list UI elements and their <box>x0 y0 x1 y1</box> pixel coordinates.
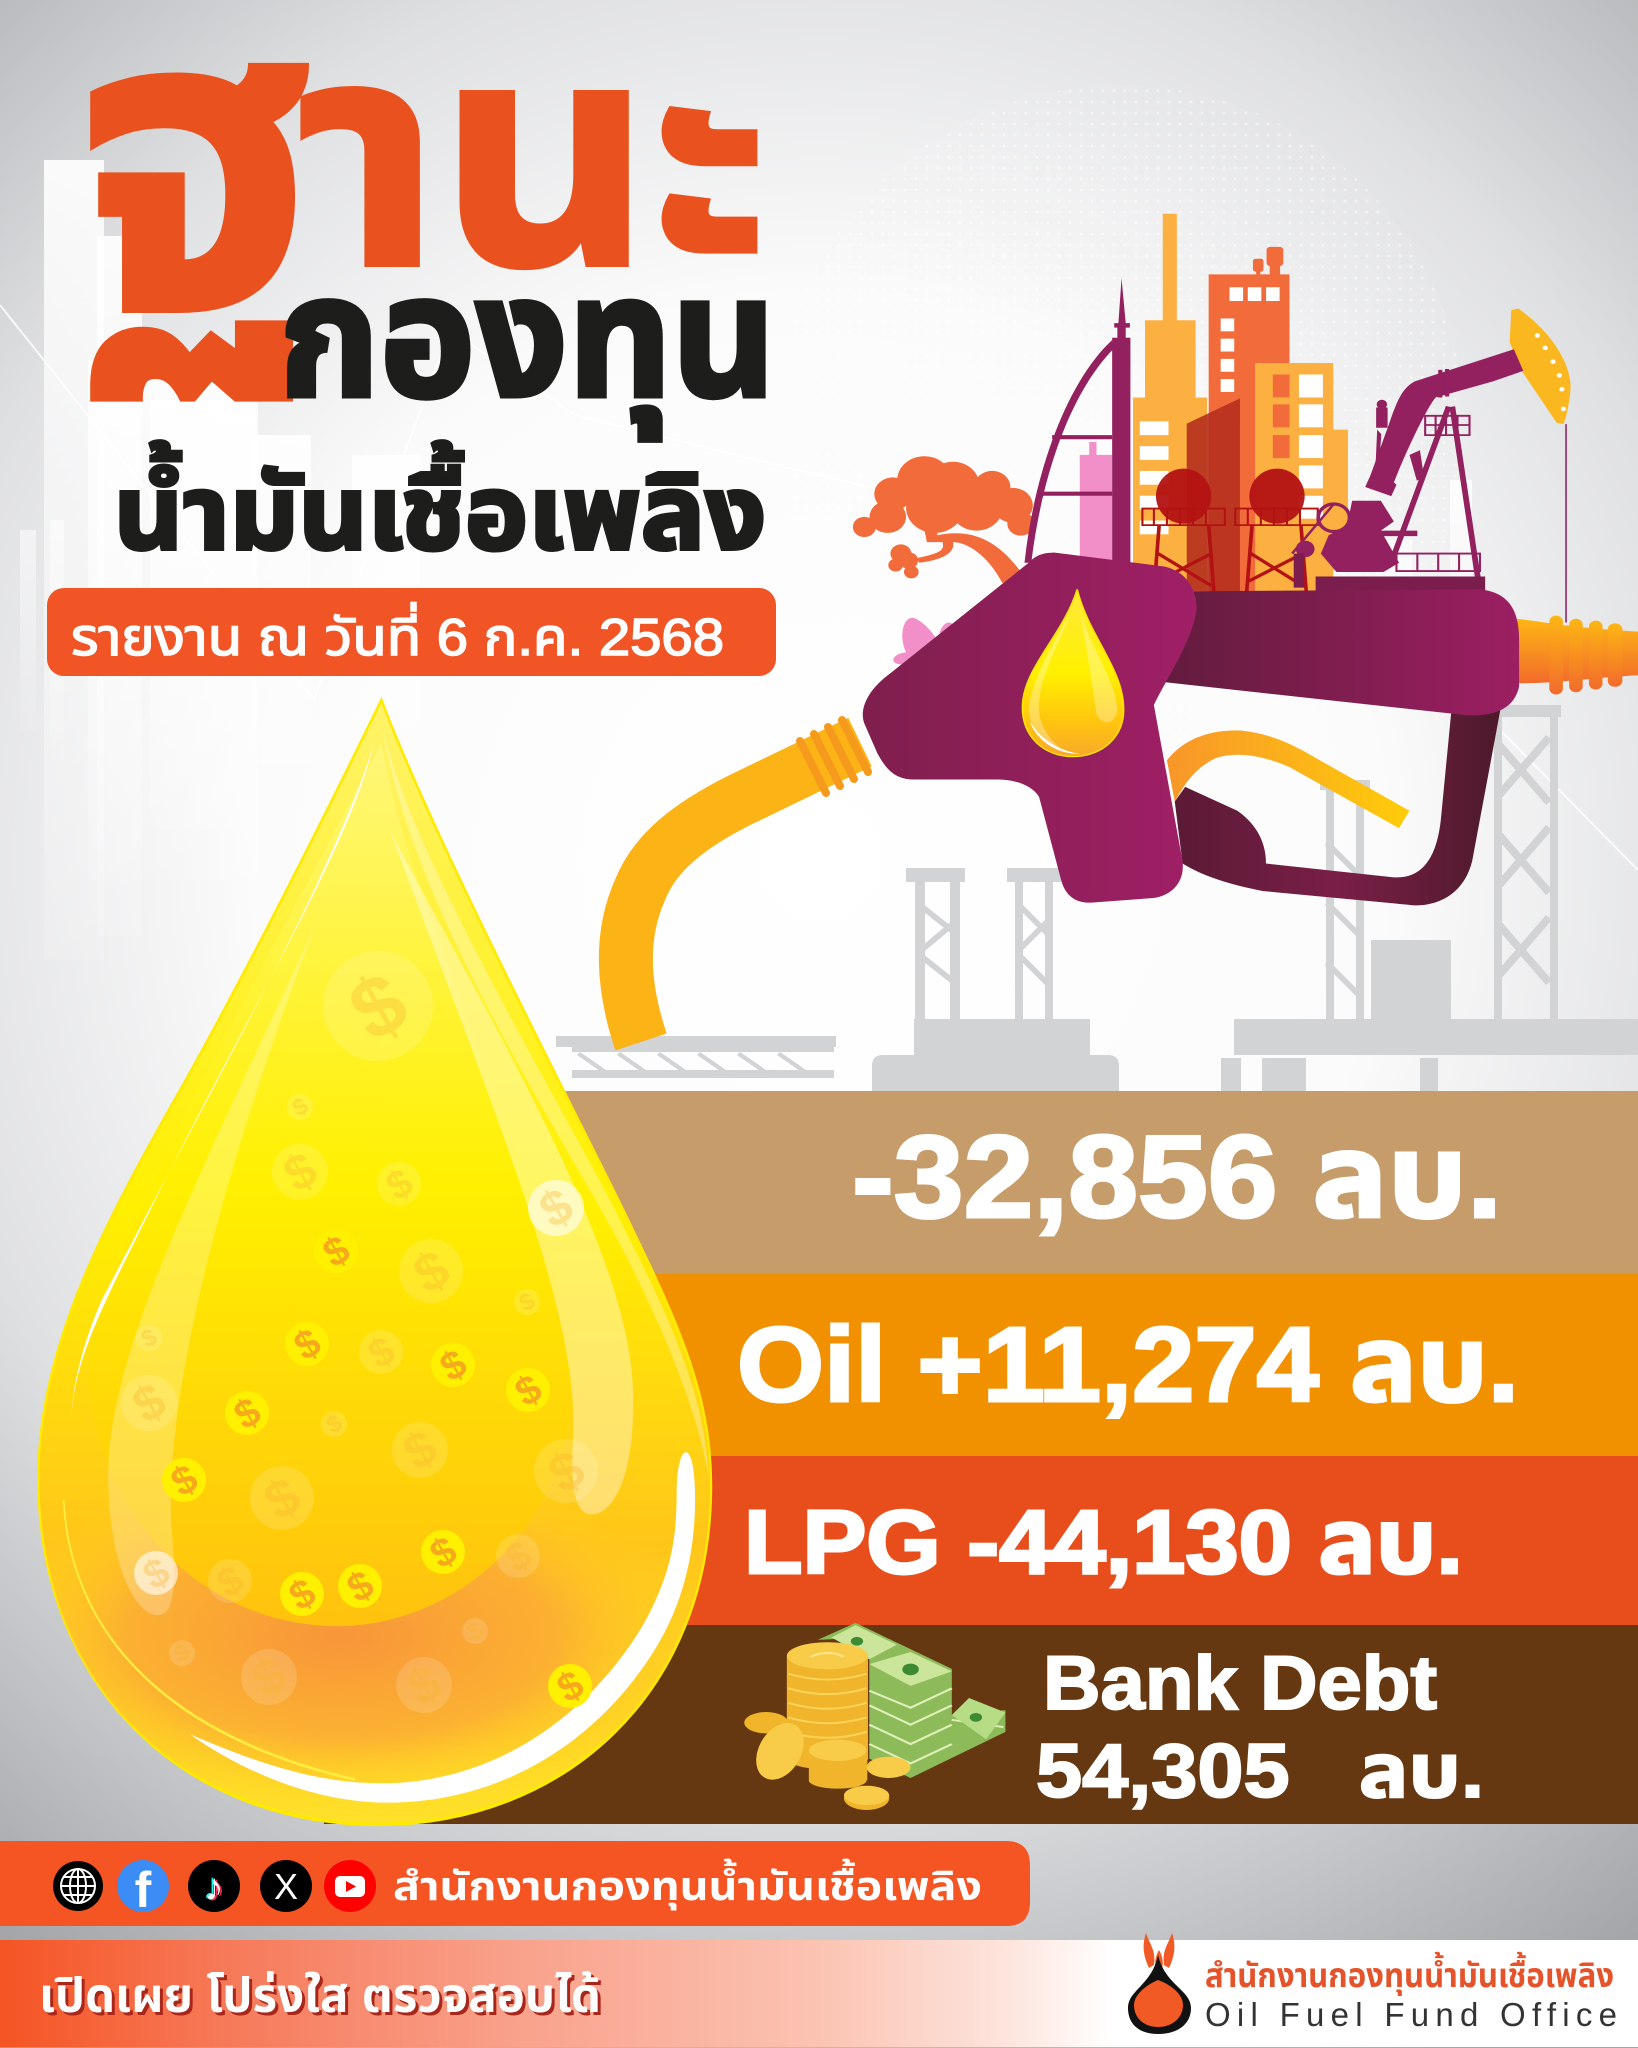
dollar coins <box>121 951 598 1716</box>
title word: ฐานะ <box>76 0 769 401</box>
dollar coins: $ <box>379 1160 420 1209</box>
title word: กองทุน: กองทุน <box>279 243 776 441</box>
dollar coins: $ <box>530 1177 582 1239</box>
dollar coins: $ <box>394 1419 446 1481</box>
icon: facebook <box>117 1860 169 1918</box>
bar: lpg <box>400 1456 1638 1625</box>
dollar coins: $ <box>288 1092 313 1122</box>
dollar coins: $ <box>433 1341 474 1390</box>
dollar coins: $ <box>361 1328 402 1377</box>
title word: น้ำมันเชื้อเพลิง: น้ำมันเชื้อเพลิง <box>114 441 766 572</box>
dollar coins: $ <box>334 953 423 1060</box>
dollar coins: $ <box>322 1409 347 1439</box>
icon: pink leaf <box>893 618 953 665</box>
dollar coins: $ <box>515 1287 540 1317</box>
dollar coins: $ <box>403 1238 460 1305</box>
footer slogan: เปิดเผย โปร่งใส ตรวจสอบได้ <box>42 1973 604 2026</box>
dollar coins: $ <box>340 1562 381 1611</box>
bar: bank debt <box>324 1625 1638 1824</box>
icon: arch hotel tower <box>1025 278 1130 563</box>
icon: pink tower <box>1080 442 1112 560</box>
title: main heading <box>76 0 776 572</box>
icon: nozzle body <box>863 553 1197 903</box>
value: oil: Oil +11,274 ลบ. <box>737 1306 1519 1424</box>
footer band <box>0 1933 1638 2047</box>
drop shell and highlights <box>0 700 711 1824</box>
dollar coins: $ <box>463 1616 488 1646</box>
icon: small oil drop <box>1022 589 1124 757</box>
icon: money and coins <box>744 1623 1005 1810</box>
social media bar <box>0 1841 1030 1926</box>
date pill <box>47 588 776 676</box>
dollar coins: $ <box>254 1465 311 1532</box>
icon: left fuel hose <box>626 720 868 1042</box>
value: lpg: LPG -44,130 ลบ. <box>744 1493 1463 1593</box>
icon: tiktok <box>188 1860 240 1912</box>
dollar coins: $ <box>423 1528 464 1577</box>
icon: trigger handle <box>1175 707 1501 905</box>
logo text english: Oil Fuel Fund Office <box>1205 1996 1617 2033</box>
value: bank debt label: Bank Debt <box>1043 1641 1437 1726</box>
icon: pump jack <box>1292 308 1571 622</box>
bar: total fund <box>400 1091 1638 1274</box>
icon: tiktok: ♪ <box>202 1866 222 1908</box>
dollar coins: $ <box>136 1549 177 1598</box>
icon: tree <box>853 456 1034 583</box>
dollar coins: $ <box>170 1638 195 1668</box>
dollar coins: $ <box>508 1366 549 1415</box>
fuel nozzle illustration with city <box>853 214 1638 905</box>
icon: globe <box>53 1861 103 1911</box>
dollar coins: $ <box>227 1389 268 1438</box>
value: total fund: -32,856 ลบ. <box>852 1111 1502 1242</box>
icon: storage tanks <box>1142 469 1318 591</box>
icon: yellow inner tube <box>1167 730 1410 828</box>
icon: tiktok: ♪ <box>206 1868 226 1910</box>
dollar coins: $ <box>538 1438 595 1505</box>
dollar coins: $ <box>550 1662 591 1711</box>
icon: x: X <box>274 1866 298 1907</box>
background oil rigs silhouette <box>556 705 1638 1091</box>
icon: youtube <box>324 1860 376 1912</box>
date pill: รายงาน ณ วันที่ 6 ก.ค. 2568 <box>71 602 724 667</box>
dollar coins: $ <box>274 1141 326 1203</box>
value: bank debt amount: 54,305 ลบ. <box>1036 1729 1484 1814</box>
dollar coins: $ <box>498 1532 539 1581</box>
dollar coins: $ <box>123 1372 175 1434</box>
dollar coins: $ <box>164 1456 205 1505</box>
logo: oil fuel fund office <box>1128 1933 1617 2034</box>
footer slogan: เปิดเผย โปร่งใส ตรวจสอบได้ <box>39 1970 601 2023</box>
social bar label: สำนักงานกองทุนน้ำมันเชื้อเพลิง <box>393 1858 982 1911</box>
icon: nozzle barrel <box>1164 589 1519 715</box>
dollar coins: $ <box>137 1323 162 1353</box>
icon: tiktok: ♪ <box>204 1867 224 1909</box>
dollar coins: $ <box>282 1570 323 1619</box>
dollar coins: $ <box>210 1557 251 1606</box>
dollar coins: $ <box>316 1227 357 1276</box>
big oil drop <box>0 700 711 1824</box>
value bars <box>324 1091 1638 1824</box>
dollar coins: $ <box>287 1320 328 1369</box>
icon: right hose <box>1514 616 1638 695</box>
bar: oil <box>400 1274 1638 1456</box>
icon: city buildings <box>1133 214 1348 596</box>
icon: x <box>260 1860 312 1912</box>
icon: facebook: f <box>135 1862 152 1918</box>
dollar coins: $ <box>398 1654 450 1716</box>
dollar coins: $ <box>243 1646 295 1708</box>
